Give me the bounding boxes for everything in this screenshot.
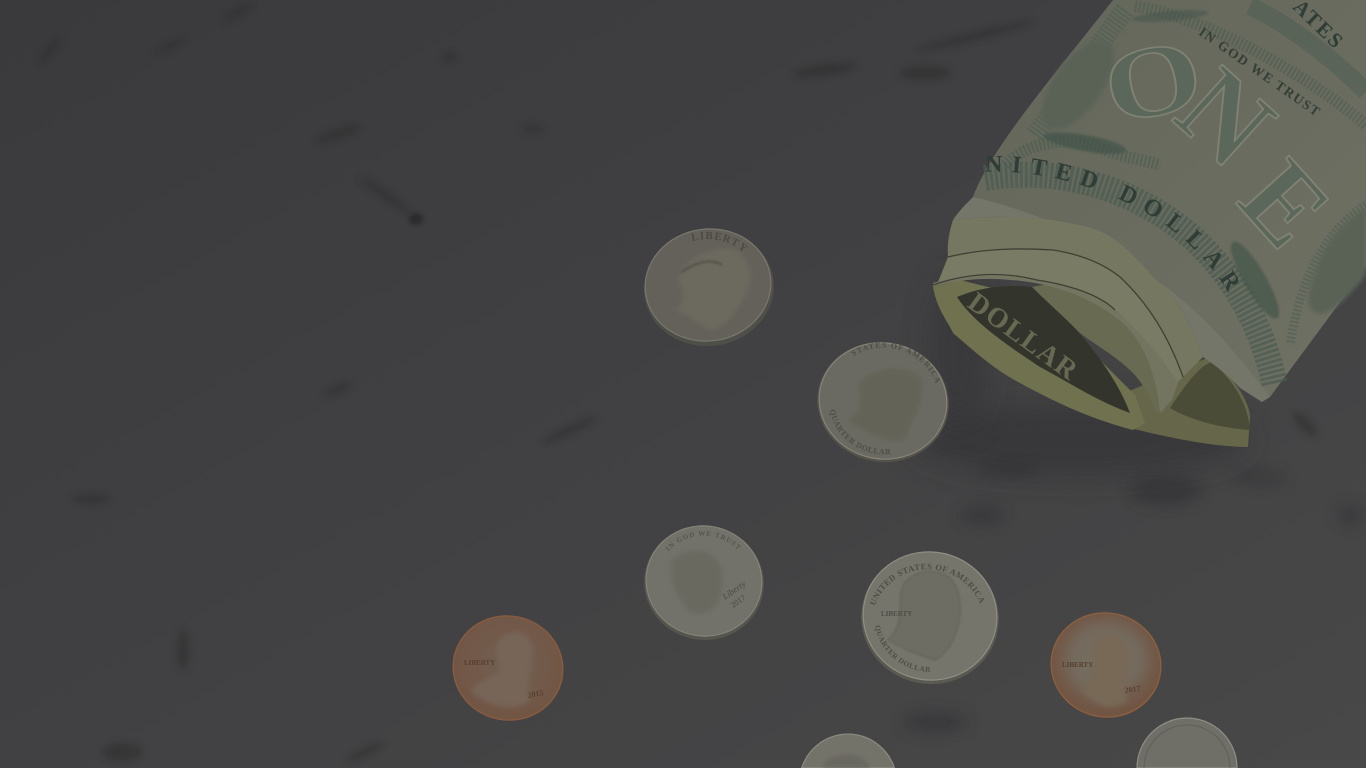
- coin: penny right: LIBERTY: [1062, 661, 1093, 669]
- coin: nickel: Liberty: [720, 579, 747, 602]
- inner flap: [1032, 285, 1165, 413]
- fold shadow lines: [933, 249, 1183, 377]
- coin: quarter lower: LIBERTY: [881, 610, 912, 618]
- text: ONE: E: [1216, 138, 1353, 270]
- text: IN GOD WE TRUST: IN GOD WE TRUST: [1196, 24, 1324, 120]
- text: ONE: O: [1094, 16, 1212, 146]
- coin: worn quarter: LIBERTY: [690, 232, 748, 252]
- coin: partial bottom right: [1137, 718, 1237, 768]
- ornament scrolls: [1042, 8, 1287, 324]
- coin: bright quarter: STATES OF AMERICA: [852, 342, 940, 384]
- coin: nickel: 2017: [729, 593, 747, 610]
- coin: worn quarter: [644, 228, 774, 346]
- bill back layer: [1120, 358, 1250, 447]
- coin: penny left: LIBERTY: [464, 659, 495, 667]
- coin: penny right: 2017: [1124, 684, 1141, 695]
- text: UNITED DOLLAR: NITED DOLLAR: [986, 156, 1238, 292]
- ornate green border: [985, 6, 1366, 385]
- coin: bright quarter: [817, 342, 949, 462]
- text: DOLLAR on inner fold: DOLLAR: [962, 287, 1084, 387]
- coin: quarter lower: QUARTER DOLLAR: [874, 626, 930, 672]
- coin: nickel: [644, 525, 764, 640]
- white paper band: [953, 197, 1270, 402]
- coin: quarter lower: [861, 551, 999, 684]
- outer curl: [933, 280, 1145, 430]
- third fold layer: [933, 274, 1180, 413]
- coin: penny right: [1041, 603, 1171, 727]
- text: ONE: [1094, 16, 1353, 270]
- roll inner dark cavity: [957, 286, 1130, 413]
- bill main sheet: [973, 0, 1366, 397]
- coin: penny left: [443, 606, 573, 730]
- rolled one dollar bill: [933, 0, 1366, 447]
- bill back fold seal: [1170, 362, 1250, 430]
- portrait left: [1029, 29, 1127, 141]
- coin: partial bottom centre: [802, 734, 894, 768]
- text: ONE: N: [1153, 44, 1297, 191]
- coin: quarter lower: UNITED STATES OF AMERICA: [870, 564, 984, 605]
- portrait right: [1308, 208, 1366, 314]
- coin: penny left: 2015: [527, 688, 544, 700]
- coin: nickel: IN GOD WE TRUST: [666, 531, 741, 552]
- top fold layer: [948, 217, 1203, 377]
- coin: bright quarter: QUARTER DOLLAR: [830, 410, 891, 454]
- second fold layer: [938, 249, 1183, 382]
